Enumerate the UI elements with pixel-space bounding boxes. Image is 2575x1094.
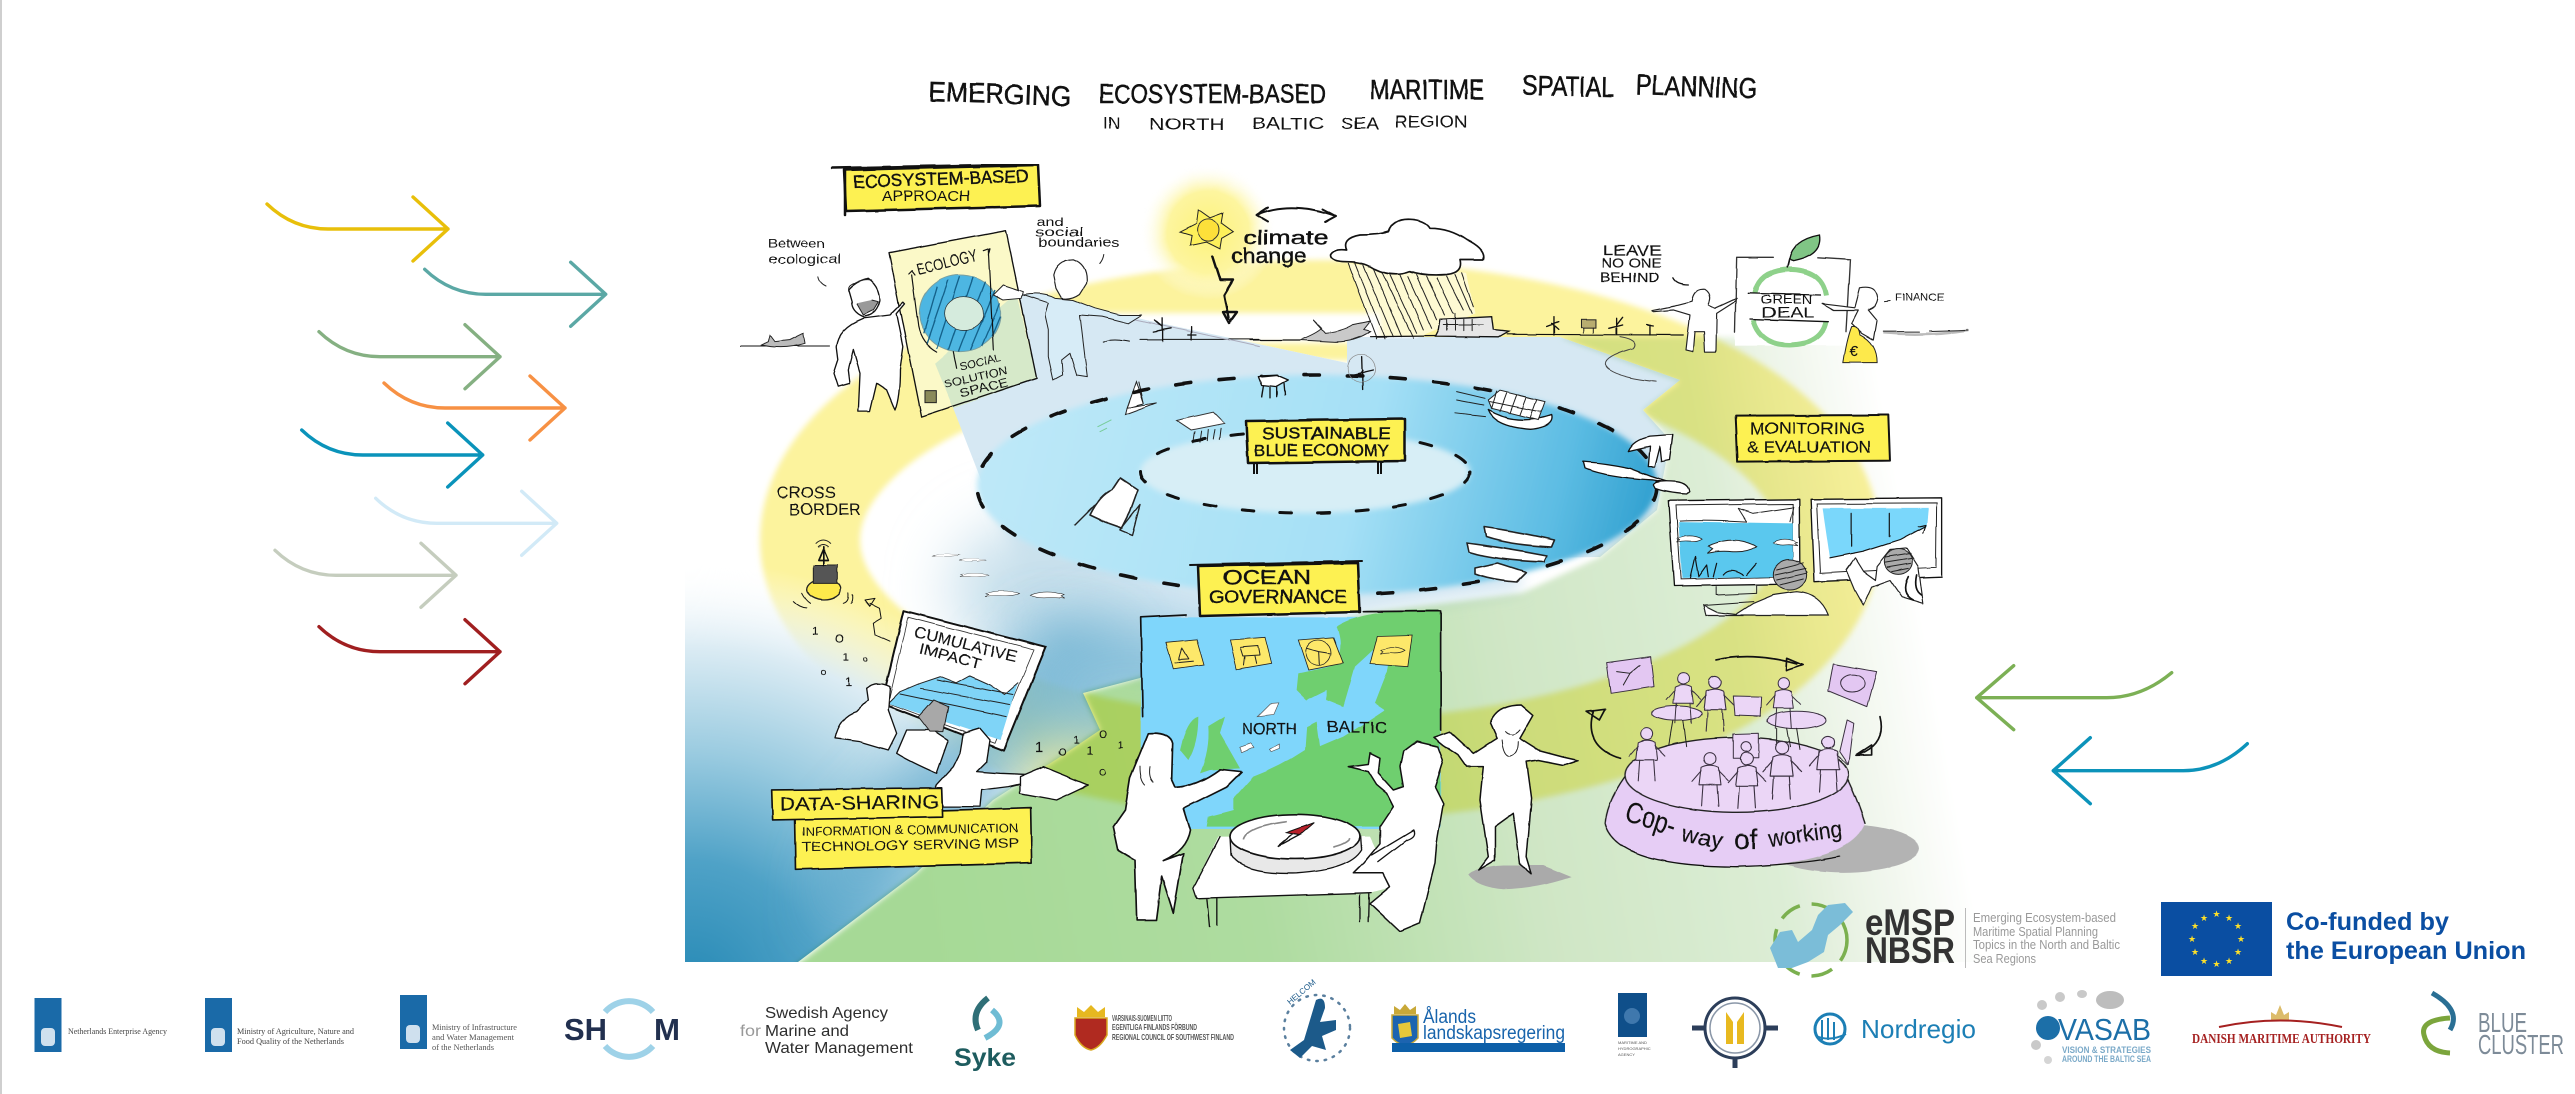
logo: eMSP NBSR: Maritime Spatial Planning bbox=[1973, 925, 2098, 939]
arrow: sage green bbox=[319, 325, 500, 389]
caption: and social boundaries: social bbox=[1035, 225, 1083, 239]
pale sea: lower fade bbox=[1010, 536, 1526, 681]
rain shower bbox=[1348, 263, 1475, 338]
logo: Danish Maritime Authority bbox=[2192, 1005, 2371, 1046]
ecosystem-based approach sign: ECOSYSTEM-BASED bbox=[852, 166, 1029, 192]
ecosystem-based approach panel: SOCIAL bbox=[959, 353, 1002, 374]
information technology sign: TECHNOLOGY SERVING MSP bbox=[801, 836, 1018, 855]
logo: Netherlands Enterprise Agency bbox=[34, 998, 168, 1052]
digits right: O bbox=[1099, 767, 1106, 777]
compass bbox=[1230, 814, 1362, 873]
logo: Nordregio: Nordregio bbox=[1861, 1014, 1976, 1044]
ecosystem-based approach sign: APPROACH bbox=[882, 188, 970, 205]
yellow ring wash bbox=[810, 310, 1830, 770]
digits left bbox=[813, 625, 867, 689]
cloud bbox=[1330, 219, 1484, 275]
data-sharing sign bbox=[772, 788, 943, 820]
person handing paper bbox=[935, 728, 1038, 807]
cycle arrows bbox=[1587, 657, 1881, 758]
caption: cross border: CROSS bbox=[777, 483, 836, 502]
logo: co-funded by the European Union: ★ bbox=[2200, 913, 2208, 923]
icon: sun bbox=[1180, 210, 1233, 248]
caption: leave no one behind: LEAVE bbox=[1603, 244, 1662, 260]
logo: SHOM: M bbox=[654, 1012, 680, 1047]
logo: co-funded by the European Union: ★ bbox=[2188, 934, 2196, 944]
digits left: 1 bbox=[843, 652, 849, 664]
platform base bbox=[1605, 770, 1865, 867]
logo: co-funded by the European Union: ★ bbox=[2191, 921, 2199, 931]
monitoring and evaluation sign bbox=[1736, 415, 1890, 462]
horizon bbox=[1250, 334, 1683, 340]
logo: co-funded by the European Union: ★ bbox=[2225, 913, 2233, 923]
floating solar panel bbox=[1177, 412, 1225, 430]
ocean governance map board: BALTIC bbox=[1327, 719, 1387, 736]
logo: eMSP NBSR bbox=[1770, 902, 2120, 976]
page edge line bbox=[0, 0, 2, 1094]
land bbox=[790, 337, 2015, 970]
fish shoal bbox=[932, 554, 1065, 599]
wind turbines at sea bbox=[1153, 318, 1196, 342]
logo: co-funded by the European Union: ★ bbox=[2234, 921, 2242, 931]
green deal and leave no one behind: FINANCE bbox=[1895, 292, 1945, 304]
poster bbox=[889, 231, 1037, 417]
subtitle bbox=[1103, 112, 1467, 134]
arrow: pale blue bbox=[376, 491, 557, 555]
map land bbox=[1207, 610, 1440, 827]
information technology sign: INFORMATION & COMMUNICATION bbox=[801, 821, 1018, 839]
map sea bbox=[1141, 617, 1441, 829]
sustainable blue economy sign: BLUE ECONOMY bbox=[1254, 441, 1389, 460]
donut diagram bbox=[919, 275, 1001, 352]
title: EMERGING bbox=[928, 76, 1072, 112]
sustainable blue economy sign: SUSTAINABLE bbox=[1262, 424, 1391, 443]
small ship bbox=[762, 333, 805, 347]
caption: cop way of working bbox=[1621, 796, 1844, 854]
sticky note: platform bbox=[1230, 637, 1272, 669]
cargo ship bbox=[1435, 317, 1508, 337]
community of practice platform bbox=[1587, 657, 1919, 872]
arrow: grey bbox=[275, 543, 456, 607]
subtitle: SEA bbox=[1341, 114, 1380, 133]
coastline curve bbox=[1605, 337, 1657, 382]
green deal apple ring: GREEN bbox=[1761, 293, 1812, 307]
caption: and social boundaries bbox=[1035, 215, 1120, 264]
ecosystem-based approach panel bbox=[762, 215, 1225, 443]
logo: Ministry of Infrastructure: of the Netherlands bbox=[432, 1042, 495, 1052]
logo: Swedish Agency for Marine and Water Management: Water Management bbox=[765, 1040, 914, 1057]
logo: HELCOM bbox=[1284, 977, 1350, 1061]
logo: co-funded by the European Union: ★ bbox=[2225, 956, 2233, 966]
digits left: 1 bbox=[813, 625, 819, 637]
subtitle: IN bbox=[1103, 114, 1120, 133]
sea activities bbox=[1258, 354, 1552, 429]
flip board bbox=[1733, 733, 1758, 758]
logo: Swedish hydrographic: HYDROGRAPHIC bbox=[1618, 1046, 1651, 1051]
title: SPATIAL bbox=[1522, 70, 1614, 103]
ocean governance sign bbox=[1190, 561, 1362, 616]
sustainable blue economy sign bbox=[1246, 419, 1405, 474]
logo: Alands landskapsregering bbox=[1392, 1004, 1565, 1052]
data-sharing sign: DATA-SHARING bbox=[780, 791, 939, 815]
outer blue ring water bbox=[977, 375, 1657, 595]
logo: eMSP NBSR: NBSR bbox=[1865, 930, 1955, 971]
logo: Ministry of Agriculture: Ministry of Agriculture, Nature and bbox=[237, 1026, 355, 1036]
caption: cross border bbox=[777, 483, 861, 519]
logo: eMSP NBSR: Topics in the North and Baltic bbox=[1973, 938, 2120, 952]
logo: Ministry of Infrastructure: Ministry of Infrastructure bbox=[432, 1022, 517, 1032]
logo: Regional Council of Southwest Finland: REGIONAL COUNCIL OF SOUTHWEST FINLAND bbox=[1112, 1032, 1234, 1042]
logo: VASAB: VASAB bbox=[2058, 1012, 2151, 1047]
caption: cross border: BORDER bbox=[789, 500, 861, 519]
monitoring and evaluation sign: & EVALUATION bbox=[1747, 440, 1872, 457]
caption: and social boundaries: boundaries bbox=[1038, 236, 1120, 250]
caption: leave no one behind bbox=[1600, 244, 1688, 285]
logo: co-funded by the European Union: the European Union bbox=[2286, 937, 2526, 965]
arrow: blue bbox=[302, 423, 483, 487]
logo: VASAB bbox=[2031, 990, 2151, 1064]
logo: Ministry of Agriculture: Food Quality of the Netherlands bbox=[237, 1036, 345, 1046]
caption: cop way of working: working bbox=[1766, 816, 1844, 852]
green deal apple ring: DEAL bbox=[1762, 305, 1815, 321]
logo: Ministry of Agriculture bbox=[205, 998, 355, 1052]
information technology sign bbox=[795, 808, 1032, 869]
caption: between ecological: ecological bbox=[768, 251, 841, 266]
logo: co-funded by the European Union bbox=[2161, 902, 2526, 976]
tablet: cumulative impact: IMPACT bbox=[917, 642, 983, 673]
cross border and buoy bbox=[772, 483, 1123, 869]
title: ECOSYSTEM-BASED bbox=[1099, 79, 1326, 109]
woman bbox=[993, 259, 1142, 380]
digits right: O bbox=[1058, 748, 1066, 759]
poster: network bbox=[1607, 657, 1654, 693]
digits left: 1 bbox=[845, 675, 852, 689]
sun and climate change bbox=[1140, 164, 1336, 323]
horizon shadow bbox=[1883, 330, 1968, 334]
digits right: O bbox=[1099, 729, 1107, 740]
deep water lower left bbox=[685, 507, 1229, 962]
logo: Swedish Agency for Marine and Water Management: Swedish Agency bbox=[765, 1005, 888, 1022]
colored arrows: right side bbox=[1977, 666, 2247, 804]
logo: co-funded by the European Union: ★ bbox=[2237, 934, 2245, 944]
analyst left bbox=[1703, 560, 1828, 615]
logo: Swedish hydrographic bbox=[1618, 993, 1651, 1057]
logo row bbox=[34, 977, 2564, 1072]
tablet: cumulative impact bbox=[882, 611, 1046, 751]
logo: VASAB: VISION & STRATEGIES bbox=[2062, 1045, 2151, 1055]
person pointing at map bbox=[1113, 733, 1242, 920]
person right of poster bbox=[1822, 288, 1878, 340]
caption: leave no one behind: BEHIND bbox=[1600, 271, 1659, 285]
sun and climate change: change bbox=[1231, 245, 1307, 268]
pale sea: upper wedge bbox=[950, 293, 1680, 560]
digits left: O bbox=[835, 633, 844, 645]
money bag: € bbox=[1850, 344, 1858, 360]
analyst right bbox=[1847, 548, 1923, 605]
dashed ocean rings bbox=[977, 375, 1657, 595]
logo: SHOM: SH bbox=[564, 1012, 607, 1047]
logo: co-funded by the European Union: ★ bbox=[2200, 956, 2208, 966]
ecosystem-based approach panel: ECOLOGY bbox=[915, 247, 979, 279]
logo: Syke: Syke bbox=[954, 1044, 1016, 1072]
double arrow bbox=[1256, 207, 1336, 222]
offshore platform bbox=[1258, 375, 1288, 397]
monitor: fish habitat bbox=[1668, 499, 1800, 605]
lightning bolt bbox=[1212, 255, 1237, 323]
sea interior mask bbox=[1250, 337, 1680, 420]
inner dashed ring bbox=[1140, 431, 1470, 513]
logo: Swedish hydrographic: AGENCY bbox=[1618, 1052, 1635, 1057]
arrow: teal bbox=[425, 262, 606, 326]
ferries lower ring bbox=[1467, 527, 1555, 582]
logo: Syke bbox=[954, 998, 1016, 1072]
ocean governance sign: GOVERNANCE bbox=[1209, 587, 1347, 607]
logo: HELCOM: HELCOM bbox=[1286, 977, 1318, 1007]
money bag bbox=[1843, 326, 1877, 363]
logo: Regional Council of Southwest Finland bbox=[1075, 1005, 1234, 1050]
rain cloud bbox=[1330, 219, 1484, 338]
fishing vessel in ring bbox=[1075, 478, 1140, 535]
logo: SHOM bbox=[564, 1001, 680, 1057]
sticky note: fish bbox=[1370, 635, 1413, 667]
people on platform bbox=[1629, 673, 1847, 808]
impact chart bbox=[888, 676, 1018, 740]
caption: cop way of working: Cop- bbox=[1621, 796, 1680, 843]
title: MARITIME bbox=[1370, 74, 1484, 105]
logo: co-funded by the European Union: ★ bbox=[2191, 947, 2199, 957]
caption: between ecological bbox=[768, 236, 841, 286]
caption: cop way of working: way bbox=[1679, 820, 1726, 854]
offshore turbine bbox=[1352, 357, 1373, 390]
logo: Swedish Agency for Marine and Water Management: Marine and bbox=[765, 1023, 849, 1040]
logo: co-funded by the European Union: ★ bbox=[2212, 959, 2221, 969]
logo: co-funded by the European Union: ★ bbox=[2234, 947, 2242, 957]
arrow: orange bbox=[384, 376, 565, 440]
logo: eMSP NBSR: eMSP bbox=[1865, 902, 1955, 943]
logo: Blue Cluster: BLUE bbox=[2478, 1007, 2527, 1038]
poster: green deal bbox=[1735, 258, 1848, 346]
sailing ship bbox=[1300, 320, 1370, 342]
poster: cycle bbox=[1828, 664, 1877, 707]
arrow: green pointing left bbox=[1977, 666, 2172, 730]
ocean governance sign: OCEAN bbox=[1223, 567, 1311, 589]
sailboat bbox=[1125, 382, 1157, 415]
caption: leave no one behind: NO ONE bbox=[1602, 257, 1662, 271]
logo: Regional Council of Southwest Finland: EGENTLIGA FINLANDS FÖRBUND bbox=[1112, 1022, 1197, 1032]
logo: Danish Maritime Authority: DANISH MARITIME AUTHORITY bbox=[2192, 1031, 2371, 1046]
digits right: 1 bbox=[1073, 735, 1079, 747]
tablet: cumulative impact: CUMULATIVE bbox=[912, 624, 1018, 666]
digits right: 1 bbox=[1087, 744, 1094, 758]
arrow: dark red bbox=[319, 620, 500, 684]
arrow: blue pointing left bbox=[2053, 738, 2247, 804]
sun and climate change: climate bbox=[1244, 228, 1328, 249]
outer dashed ring bbox=[977, 375, 1657, 595]
logo: Swedish hydrographic: MARITIME AND bbox=[1618, 1040, 1647, 1045]
small wind farm patches bbox=[1239, 703, 1280, 753]
monitor: trend chart bbox=[1811, 498, 1942, 582]
logo: Netherlands Enterprise Agency: Netherlands Enterprise Agency bbox=[68, 1026, 168, 1036]
ecosystem-based approach panel: SPACE bbox=[958, 375, 1010, 400]
logo: Regional Council of Southwest Finland: VARSINAIS-SUOMEN LIITTO bbox=[1112, 1013, 1172, 1023]
logo: co-funded by the European Union: ★ bbox=[2212, 909, 2221, 919]
icon: leaf bbox=[1789, 235, 1820, 261]
green deal and leave no one behind bbox=[1600, 235, 1968, 462]
caption: and social boundaries: and bbox=[1037, 215, 1063, 229]
caption: cop way of working: of bbox=[1734, 823, 1758, 854]
tables bbox=[1652, 706, 1702, 721]
digits right bbox=[1035, 729, 1123, 777]
inner ring bbox=[1140, 431, 1470, 513]
logo: eMSP NBSR: Sea Regions bbox=[1973, 952, 2036, 966]
title: PLANNING bbox=[1635, 69, 1758, 104]
turbines and sign bbox=[1547, 317, 1653, 335]
subtitle: NORTH bbox=[1149, 115, 1225, 134]
illustration background: sea, land and yellow ring bbox=[685, 293, 2015, 970]
logo: Swedish Agency for Marine and Water Management: for bbox=[740, 1023, 762, 1040]
ocean governance map board bbox=[1113, 610, 1578, 932]
easel bbox=[1839, 720, 1853, 765]
logo: co-funded by the European Union: Co-funded by bbox=[2286, 908, 2449, 936]
logo: maritime badge bbox=[1692, 998, 1778, 1068]
title bbox=[928, 69, 1758, 134]
monitoring and evaluation sign: MONITORING bbox=[1750, 419, 1865, 438]
sticky note: wind turbine bbox=[1298, 637, 1343, 670]
sticky note: sailboat bbox=[1166, 639, 1204, 669]
ecosystem-based approach panel: SOLUTION bbox=[943, 365, 1009, 391]
horizon lines bbox=[740, 295, 1260, 347]
container vessel bbox=[1488, 410, 1552, 429]
arrow: impact to buoy bbox=[865, 598, 890, 642]
platform top bbox=[1625, 738, 1848, 812]
white gap above horizon bbox=[1000, 313, 1380, 343]
digits right: 1 bbox=[1035, 739, 1043, 755]
sketch layer bbox=[740, 164, 1968, 932]
digits left: o bbox=[862, 654, 867, 664]
logo: Ministry of Infrastructure: and Water Management bbox=[432, 1032, 515, 1042]
people at tablet bbox=[835, 684, 1088, 807]
digits right: 1 bbox=[1118, 741, 1123, 751]
logo: Alands landskapsregering: Ålands bbox=[1423, 1007, 1476, 1028]
man with beard bbox=[834, 278, 905, 412]
logo: eMSP NBSR: Emerging Ecosystem-based bbox=[1973, 911, 2116, 925]
woman presenting bbox=[1434, 705, 1578, 873]
subtitle: REGION bbox=[1395, 112, 1467, 131]
green deal apple ring bbox=[1748, 269, 1828, 345]
man at table bbox=[1348, 742, 1443, 932]
poster lower tint bbox=[935, 293, 1037, 408]
ecosystem-based approach sign bbox=[832, 164, 1040, 215]
map labels: NORTH bbox=[1242, 721, 1297, 738]
colored arrows: left column bbox=[267, 197, 606, 684]
caption: between ecological: Between bbox=[768, 236, 825, 250]
logo: Blue Cluster bbox=[2424, 993, 2564, 1060]
logo: VASAB: AROUND THE BALTIC SEA bbox=[2062, 1054, 2151, 1064]
arrow: yellow bbox=[267, 197, 448, 261]
woman shadow bbox=[1468, 865, 1572, 889]
table bbox=[1193, 837, 1393, 898]
monitors and analysts bbox=[1668, 498, 1942, 615]
subtitle: BALTIC bbox=[1252, 114, 1324, 133]
platform shadow bbox=[1767, 824, 1919, 872]
logo: Ministry of Infrastructure bbox=[400, 995, 517, 1052]
axes bbox=[908, 248, 993, 368]
logo: Swedish Agency for Marine and Water Management bbox=[740, 1005, 914, 1057]
small ferry bbox=[1653, 481, 1689, 494]
logo: Alands landskapsregering: landskapsregering bbox=[1423, 1023, 1565, 1044]
board frame bbox=[1141, 611, 1441, 730]
person left of poster bbox=[1652, 289, 1737, 352]
harbour platform bbox=[1628, 435, 1673, 467]
digits left: o bbox=[821, 667, 826, 677]
vessels and turbines on the horizon bbox=[1250, 313, 1683, 382]
icon: buoy bbox=[793, 540, 853, 608]
